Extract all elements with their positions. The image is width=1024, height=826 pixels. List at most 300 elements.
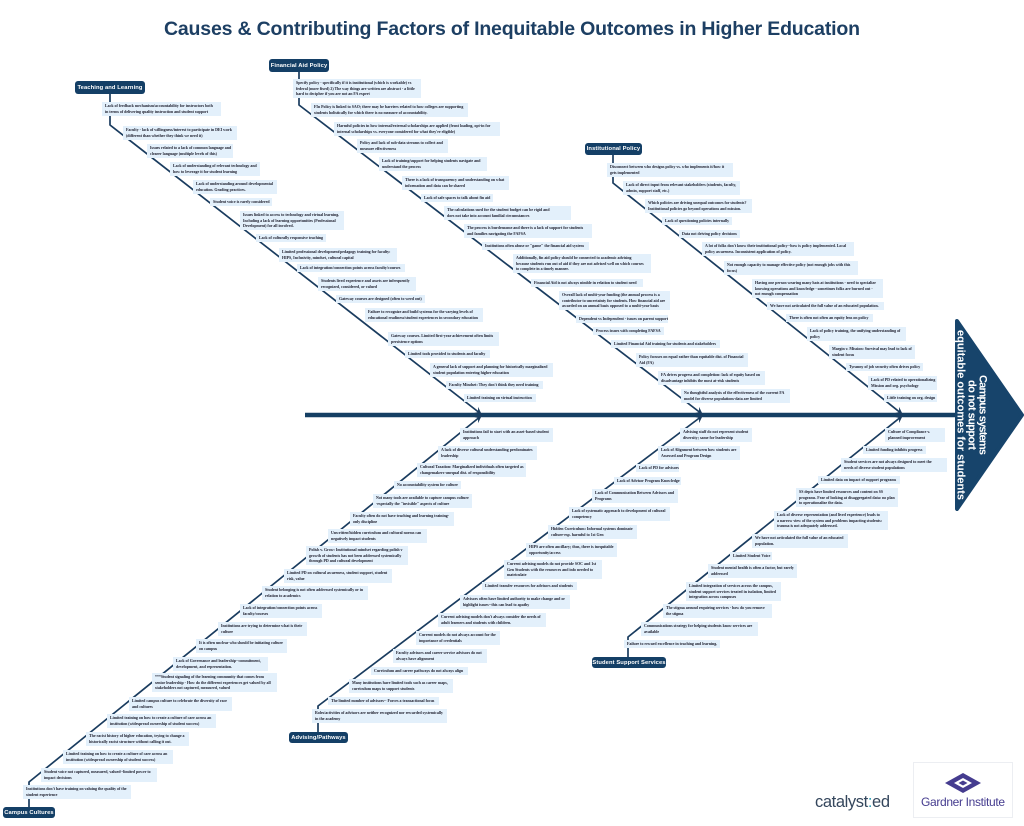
note: development, and representation.	[176, 664, 232, 669]
note	[402, 176, 509, 190]
note: Roles/activities of advisors are neither recognized nor rewarded systemically	[315, 710, 443, 715]
note: Lack of Alignment between how students are	[661, 447, 736, 452]
note: programs. Fear of looking at disaggregated data: no plan	[799, 495, 895, 500]
note: Culture of Compliance v.	[888, 429, 930, 434]
note: Issues related to a lack of common language and	[150, 145, 231, 150]
note: The racist history of higher education, trying to change a	[89, 733, 185, 738]
note: needs of diverse student populations	[844, 465, 905, 470]
spine arrow	[305, 319, 1024, 511]
note: We have not articulated the full value of an educated population.	[770, 303, 879, 308]
note	[107, 714, 216, 728]
note	[884, 394, 937, 402]
note: approach	[463, 435, 479, 440]
note	[482, 242, 589, 250]
note	[796, 488, 898, 507]
note	[23, 785, 131, 798]
note: Polish v. Grow: Institutional mindset regarding polish v	[309, 547, 402, 552]
note: Institutional policies go beyond operations and mission.	[648, 206, 741, 211]
note: measure effectiveness	[360, 146, 396, 151]
note: model for diverse populations-data are limited	[684, 396, 762, 401]
note	[279, 248, 397, 262]
note	[297, 264, 405, 272]
note	[730, 552, 772, 560]
note: Faculty - lack of willingness/interest to participate in DEI work	[126, 127, 232, 132]
note: FA drives progress and completion: lack of equity based on	[661, 372, 760, 377]
note: Faculty advisors and career service advisors do not	[396, 650, 482, 655]
note: not enough compensation	[755, 291, 798, 296]
note: Issues linked to access to technology and virtual learning.	[243, 212, 339, 217]
note: Limited training on how to create a culture of care across an	[66, 751, 167, 756]
note	[421, 194, 493, 202]
note	[885, 428, 945, 442]
note: admin, support staff, etc.)	[626, 188, 669, 193]
note: student support services treated in isolation, limited	[689, 589, 776, 594]
note	[607, 163, 733, 176]
note: student population entering higher education	[433, 370, 509, 375]
note: Student services are not always designed to meet the	[844, 459, 932, 464]
note: gets implemented	[610, 170, 639, 175]
note: negatively impact students	[331, 536, 376, 541]
note	[357, 139, 448, 152]
spine arrow: Campus systems	[976, 375, 988, 455]
note: does not take into account familial circumstances	[447, 213, 529, 218]
note: policy	[810, 334, 820, 339]
note	[394, 481, 461, 489]
note: Policy focuses on equal rather than equitable dist. of Financial	[639, 354, 744, 359]
note: historically racist structure without calling it out.	[89, 739, 172, 744]
note	[173, 657, 268, 670]
logo: Gardner Institute: Gardner Institute	[921, 795, 1005, 809]
note	[123, 126, 237, 140]
note	[464, 394, 536, 402]
note: Lack of Governance and leadership--commitment,	[176, 658, 261, 663]
note	[724, 261, 858, 274]
note	[311, 103, 468, 116]
note	[240, 211, 344, 230]
note	[417, 463, 526, 476]
note	[293, 79, 421, 98]
note: Lack of PD related to operationalizing	[871, 377, 935, 382]
panel: Campus Cultures branch	[3, 417, 553, 818]
note: internal scholarships vs. everyone considered for what they're eligible)	[337, 129, 455, 134]
note: Faculty often do not have teaching and learning training-	[353, 513, 449, 518]
note: Curriculum and career pathways do not always align	[374, 668, 463, 673]
note	[86, 732, 189, 746]
branch line: Student Support Services	[627, 417, 902, 657]
note: information and data can be shared	[405, 183, 465, 188]
note: Gen Students with the resources and info needed to	[507, 567, 593, 572]
note	[318, 277, 416, 290]
note: in terms of delivering quality instruction and student support	[105, 109, 208, 114]
note: Process issues with completing FAFSA	[596, 328, 661, 333]
note	[306, 546, 408, 565]
note: educational readiness/student experiences in secondary education	[368, 315, 478, 320]
note: No thoughtful analysis of the effectiveness of the current FA	[684, 390, 784, 395]
note	[210, 198, 272, 206]
note	[807, 327, 906, 340]
note	[786, 314, 873, 322]
note: because students run out of aid if they are not advised well on which courses	[516, 261, 644, 266]
note: students holistically for which there is no measure of accountability.	[314, 110, 428, 115]
panel: Advising/Pathways branch	[289, 417, 752, 743]
heading: Campus Cultures: Campus Cultures	[4, 810, 54, 816]
note	[576, 315, 668, 323]
note	[446, 381, 543, 389]
note: Overall lack of multi-year funding (the annual process is a	[562, 292, 660, 297]
note	[513, 254, 651, 273]
note: Limited PD on cultural awareness, student support, student	[287, 570, 387, 575]
note: planned improvement	[888, 435, 925, 440]
note: There is often not often an equity lens on policy	[789, 315, 868, 320]
note: importance of credentials	[419, 638, 462, 643]
note: education. Grading practices.	[196, 187, 246, 192]
note: hard to decipher if you are not an FA expert	[296, 91, 370, 96]
heading: Student Support Services: Student Support Services	[592, 660, 666, 666]
note	[592, 489, 678, 502]
note: Lack of integration/connection points across	[243, 605, 317, 610]
logo: catalyst:ed: catalyst:ed	[815, 793, 890, 811]
heading: Financial Aid Policy: Financial Aid Policy	[271, 62, 327, 68]
note	[645, 199, 752, 212]
note: Assessed and Program Design	[661, 453, 711, 458]
note: Limited Financial Aid training for students and stakeholders	[614, 341, 716, 346]
note	[846, 363, 923, 371]
note	[379, 157, 487, 170]
note: Lack of culturally responsive teaching	[259, 235, 323, 240]
note: Lack of diverse representation (and lived experience) leads to	[777, 512, 880, 517]
note	[170, 162, 260, 176]
note: It is often unclear who should be initiating culture	[199, 640, 283, 645]
note: No accountability system for culture	[397, 482, 458, 487]
note: clearer language (multiple levels of this)	[150, 151, 217, 156]
note: Failure to recognize and build systems for the varying levels of	[368, 309, 473, 314]
note: disadvantage inhibits the most at-risk students	[661, 378, 739, 383]
note: Institutions don't have training on valuing the quality of the	[26, 786, 127, 791]
note	[614, 477, 681, 485]
note	[636, 464, 679, 472]
heading: Student Support Services	[592, 657, 666, 668]
note: integration across campuses	[689, 594, 736, 599]
note	[336, 295, 425, 303]
note: in the academy	[315, 716, 340, 721]
note: to operationalize the data.	[799, 500, 843, 505]
note	[240, 604, 322, 618]
note: always have alignment	[396, 656, 434, 661]
note	[752, 279, 883, 298]
branch line: Institutional Policy	[612, 155, 902, 413]
note	[504, 560, 602, 579]
note	[102, 102, 221, 116]
note: Having one person wearing many hats at institutions - need to specialize	[755, 280, 876, 285]
note: understand the process	[382, 164, 421, 169]
note	[531, 279, 643, 287]
note: Dependent vs Independent - issues on parent support	[579, 316, 668, 321]
note: Limited professional development/pedagogy training for faculty:	[282, 249, 390, 254]
note: SS depts have limited resources and content on SS	[799, 489, 883, 494]
note: Student belonging is not often addressed systemically or in	[265, 587, 363, 592]
note: (different than whether they think we need it)	[126, 133, 203, 138]
note: contributor to uncertainty for students. How financial aid are	[562, 298, 665, 303]
note: Current advising models do not provide SOC and 1st	[507, 561, 596, 566]
note: opportunity/access	[529, 550, 560, 555]
note	[312, 709, 447, 722]
note: -especially the "invisible" aspects of culture	[376, 501, 449, 506]
note: trauma is not adequately addressed.	[777, 523, 838, 528]
panel: Teaching and Learning branch	[75, 81, 553, 413]
note: Institutions often abuse or "game" the financial aid system	[485, 243, 584, 248]
note: There is a lack of transparency and understanding on what	[405, 177, 504, 182]
note	[438, 613, 546, 626]
note: federal (more fixed) 2) The way things are written are abstract - a little	[296, 86, 415, 91]
note: population.	[755, 541, 774, 546]
note: Not enough capacity to manage effective policy (not enough jobs with this	[727, 262, 850, 267]
note: Faculty Mindset: They don't think they need training	[449, 382, 539, 387]
note: relation to academics	[265, 593, 301, 598]
note	[482, 582, 577, 590]
note: persistence options	[391, 339, 423, 344]
heading: Institutional Policy: Institutional Policy	[587, 146, 640, 152]
note	[662, 217, 732, 225]
note: Gateway courses are designed (often to weed out)	[339, 296, 422, 301]
note	[334, 122, 500, 136]
note: Specify policy - specifically if it is institutional (which is workable) vs	[296, 80, 411, 85]
heading: Campus Cultures	[3, 807, 55, 818]
note: A general lack of support and planning for historically marginalized	[433, 364, 547, 369]
note: through PD and cultural development	[309, 558, 373, 563]
note	[863, 446, 926, 454]
note: Advising staff do not represent student	[683, 429, 748, 434]
note: how to leverage it for student learning	[173, 169, 237, 174]
note	[349, 679, 453, 692]
note	[438, 446, 537, 460]
note: Policy and lack of sub-data streams to collect and	[360, 140, 443, 145]
note: Lack of systematic approach to development of cultural	[572, 508, 665, 513]
note: a narrow view of the system and problems impacting students:	[777, 518, 882, 523]
note: Limited Student Voice	[733, 553, 770, 558]
note	[262, 586, 368, 600]
note: FIn Policy is linked to SAO; there may be barriers related to how colleges are supporting	[314, 104, 463, 109]
note: policy awareness. Inconsistent application of policy.	[705, 249, 791, 254]
note: Unwritten/hidden curriculum and cultural norms can	[331, 530, 421, 535]
note: growth of students has not been addressed systemically	[309, 553, 401, 558]
note: Student mental health is often a factor, but rarely	[711, 565, 794, 570]
note	[405, 350, 490, 358]
title: Causes & Contributing Factors of Inequitable Outcomes in Higher Education	[164, 18, 860, 40]
panel: Financial Aid Policy branch	[269, 59, 790, 413]
note	[623, 181, 740, 194]
note: Current advising models don't always consider the needs of	[441, 614, 541, 619]
note	[702, 242, 854, 256]
note: Communications strategy for helping students know services are	[644, 623, 752, 628]
note	[774, 511, 888, 530]
note	[460, 595, 570, 608]
panel: Student Support Services branch	[592, 417, 947, 668]
note: Lack of training/support for helping students navigate and	[382, 158, 480, 163]
note: Limited tools provided to students and faculty	[408, 351, 485, 356]
note	[624, 640, 720, 648]
note: impact decisions	[44, 775, 72, 780]
note	[416, 631, 500, 644]
note	[569, 507, 670, 520]
note: Students lived experience and assets are infrequently	[321, 278, 410, 283]
note: Financial Aid is not always nimble in relation to student need	[534, 280, 637, 285]
note: Lack of understanding around developmental	[196, 181, 273, 186]
note: Failure to reward excellence in teaching and learning.	[627, 641, 717, 646]
note: Gateway courses. Limited first-year achievement often limits	[391, 333, 493, 338]
note	[663, 604, 772, 618]
note	[196, 639, 287, 652]
heading: Financial Aid Policy	[269, 59, 329, 72]
note: Not many tools are available to capture campus culture	[376, 495, 469, 500]
note	[679, 230, 740, 238]
note: on campus	[199, 646, 217, 651]
note: Limited campus culture to celebrate the diversity of race	[132, 698, 227, 703]
note: to complete in a timely manner.	[516, 266, 569, 271]
note: adult learners and students with children.	[441, 620, 511, 625]
note: Margin v. Mission: Survival may lead to lack of	[832, 346, 912, 351]
note: Limited integration of services across the campus,	[689, 583, 773, 588]
note	[708, 564, 797, 578]
note	[752, 534, 848, 548]
note: ***Student signaling of the learning community that comes from	[155, 674, 264, 679]
note: Institutions are trying to determine what is their	[221, 623, 302, 628]
note: senior leadership - How do the different experiences get valued by all	[155, 680, 271, 685]
note: Lack of direct input from relevant stakeholders (students, faculty,	[626, 182, 736, 187]
note: The limited number of advisors-- Forces a transactional focus	[331, 698, 434, 703]
note	[841, 458, 947, 472]
heading: Teaching and Learning	[75, 81, 145, 94]
branch line: Teaching and Learning	[109, 94, 481, 413]
note: Lack of policy training, the unifying understanding of	[810, 328, 900, 333]
note: Lack of questioning policies internally	[665, 218, 729, 223]
note	[218, 622, 307, 636]
note: faculty/courses	[243, 611, 268, 616]
note: Including a lack of learning opportunities (Professional	[243, 218, 336, 223]
note: Which policies are driving unequal outcomes for students?	[648, 200, 746, 205]
note: focus)	[727, 268, 737, 273]
note	[680, 428, 752, 442]
note: Student voice is rarely considered	[213, 199, 270, 204]
note: and families navigating the FAFSA	[467, 231, 526, 236]
note: Lack of Communication Between Advisors and	[595, 490, 674, 495]
note: culture	[221, 629, 233, 634]
note: Many institutions have limited tools such as career maps,	[352, 680, 448, 685]
note	[548, 525, 637, 538]
note	[147, 144, 233, 158]
note: Harmful policies in how internal/external scholarships are applied (front loading, opt-in for	[337, 123, 490, 128]
spine arrow: do not support	[966, 380, 978, 450]
note: Current models do not always account for the	[419, 632, 496, 637]
note	[328, 529, 427, 542]
note: Lack of feedback mechanism/accountability for instructors both	[105, 103, 213, 108]
note: culture-esp. harmful to 1st Gen	[551, 532, 604, 537]
note: Lack of understanding of relevant technology and	[173, 163, 257, 168]
note: The process is burdensome and there is a lack of support for students	[467, 225, 583, 230]
note	[284, 569, 392, 582]
note: Student voice not captured, measured, valued--limited power to	[44, 769, 151, 774]
note: Limited data on impact of support programs	[821, 477, 896, 482]
note	[829, 345, 915, 358]
note: diversity; same for leadership	[683, 435, 733, 440]
note: Advisors often have limited authority to make change and or	[463, 596, 565, 601]
heading: Teaching and Learning: Teaching and Learning	[77, 84, 143, 90]
note	[328, 697, 439, 705]
note	[636, 353, 748, 366]
note: Limited training on virtual instruction	[467, 395, 532, 400]
note: Hidden Curriculum: Informal systems dominate	[551, 526, 633, 531]
note	[430, 363, 553, 376]
logo: Gardner Institute	[913, 762, 1013, 818]
note: Data not driving policy decisions	[682, 231, 737, 236]
note: HIPS are often ancillary; thus, there is inequitable	[529, 544, 614, 549]
note: Additionally, fin aid policy should be connected to academic advising	[516, 255, 632, 260]
note: awarded on an annual basis opposed to a multi-year basis	[562, 303, 659, 308]
note: Lack of PD for advisors	[639, 465, 679, 470]
heading: Advising/Pathways	[289, 732, 348, 743]
note	[444, 206, 571, 220]
panel: Institutional Policy branch	[585, 143, 937, 413]
note: Lack of safe spaces to talk about fin aid	[424, 195, 490, 200]
note: and cultures	[132, 704, 153, 709]
note: Programs	[595, 496, 612, 501]
heading: Institutional Policy	[585, 143, 642, 155]
note: HIPS, Inclusivity, mindset, cultural capital	[282, 255, 354, 260]
note	[767, 302, 884, 310]
note	[41, 768, 157, 782]
note	[460, 428, 553, 442]
note: Lack of Advisor Program Knowledge	[617, 478, 680, 483]
note	[658, 371, 765, 384]
note: matriculate	[507, 572, 526, 577]
note	[464, 224, 592, 238]
note: changemakers-unequal dist. of responsibility	[420, 470, 495, 475]
note	[373, 494, 472, 508]
note: Aid (FA)	[639, 360, 654, 365]
note	[686, 582, 781, 601]
note	[641, 622, 758, 636]
branch line: Campus Cultures	[28, 417, 481, 807]
note: Little training on org. design	[887, 395, 935, 400]
note: The calculations used for the student budget can be rigid and	[447, 207, 550, 212]
note: Lack of integration/connection points across faculty/courses	[300, 265, 400, 270]
note: Cultural Taxation: Marginalized individuals often targeted as	[420, 464, 523, 469]
note	[658, 446, 740, 460]
note: student experience	[26, 792, 57, 797]
note	[868, 376, 937, 390]
note: stakeholders not captured, measured, valued	[155, 685, 230, 690]
note	[193, 180, 277, 194]
note	[63, 750, 173, 764]
note	[593, 327, 664, 335]
note: Mission and org. psychology	[871, 383, 919, 388]
note	[393, 649, 487, 662]
note	[559, 291, 670, 310]
note: only discipline	[353, 519, 377, 524]
note: available	[644, 629, 659, 634]
note	[818, 476, 900, 484]
note	[681, 389, 790, 402]
note	[526, 543, 617, 556]
note: risk, value	[287, 576, 305, 581]
note: Development) for all involved.	[243, 223, 294, 228]
note: curriculum maps to support students	[352, 686, 414, 691]
heading: Advising/Pathways: Advising/Pathways	[291, 734, 346, 740]
note: Limited training on how to create a culture of care across an	[110, 715, 211, 720]
note: addressed	[711, 571, 728, 576]
note: student focus	[832, 352, 854, 357]
note: Limited funding inhibits progress	[866, 447, 922, 452]
note	[129, 697, 232, 710]
